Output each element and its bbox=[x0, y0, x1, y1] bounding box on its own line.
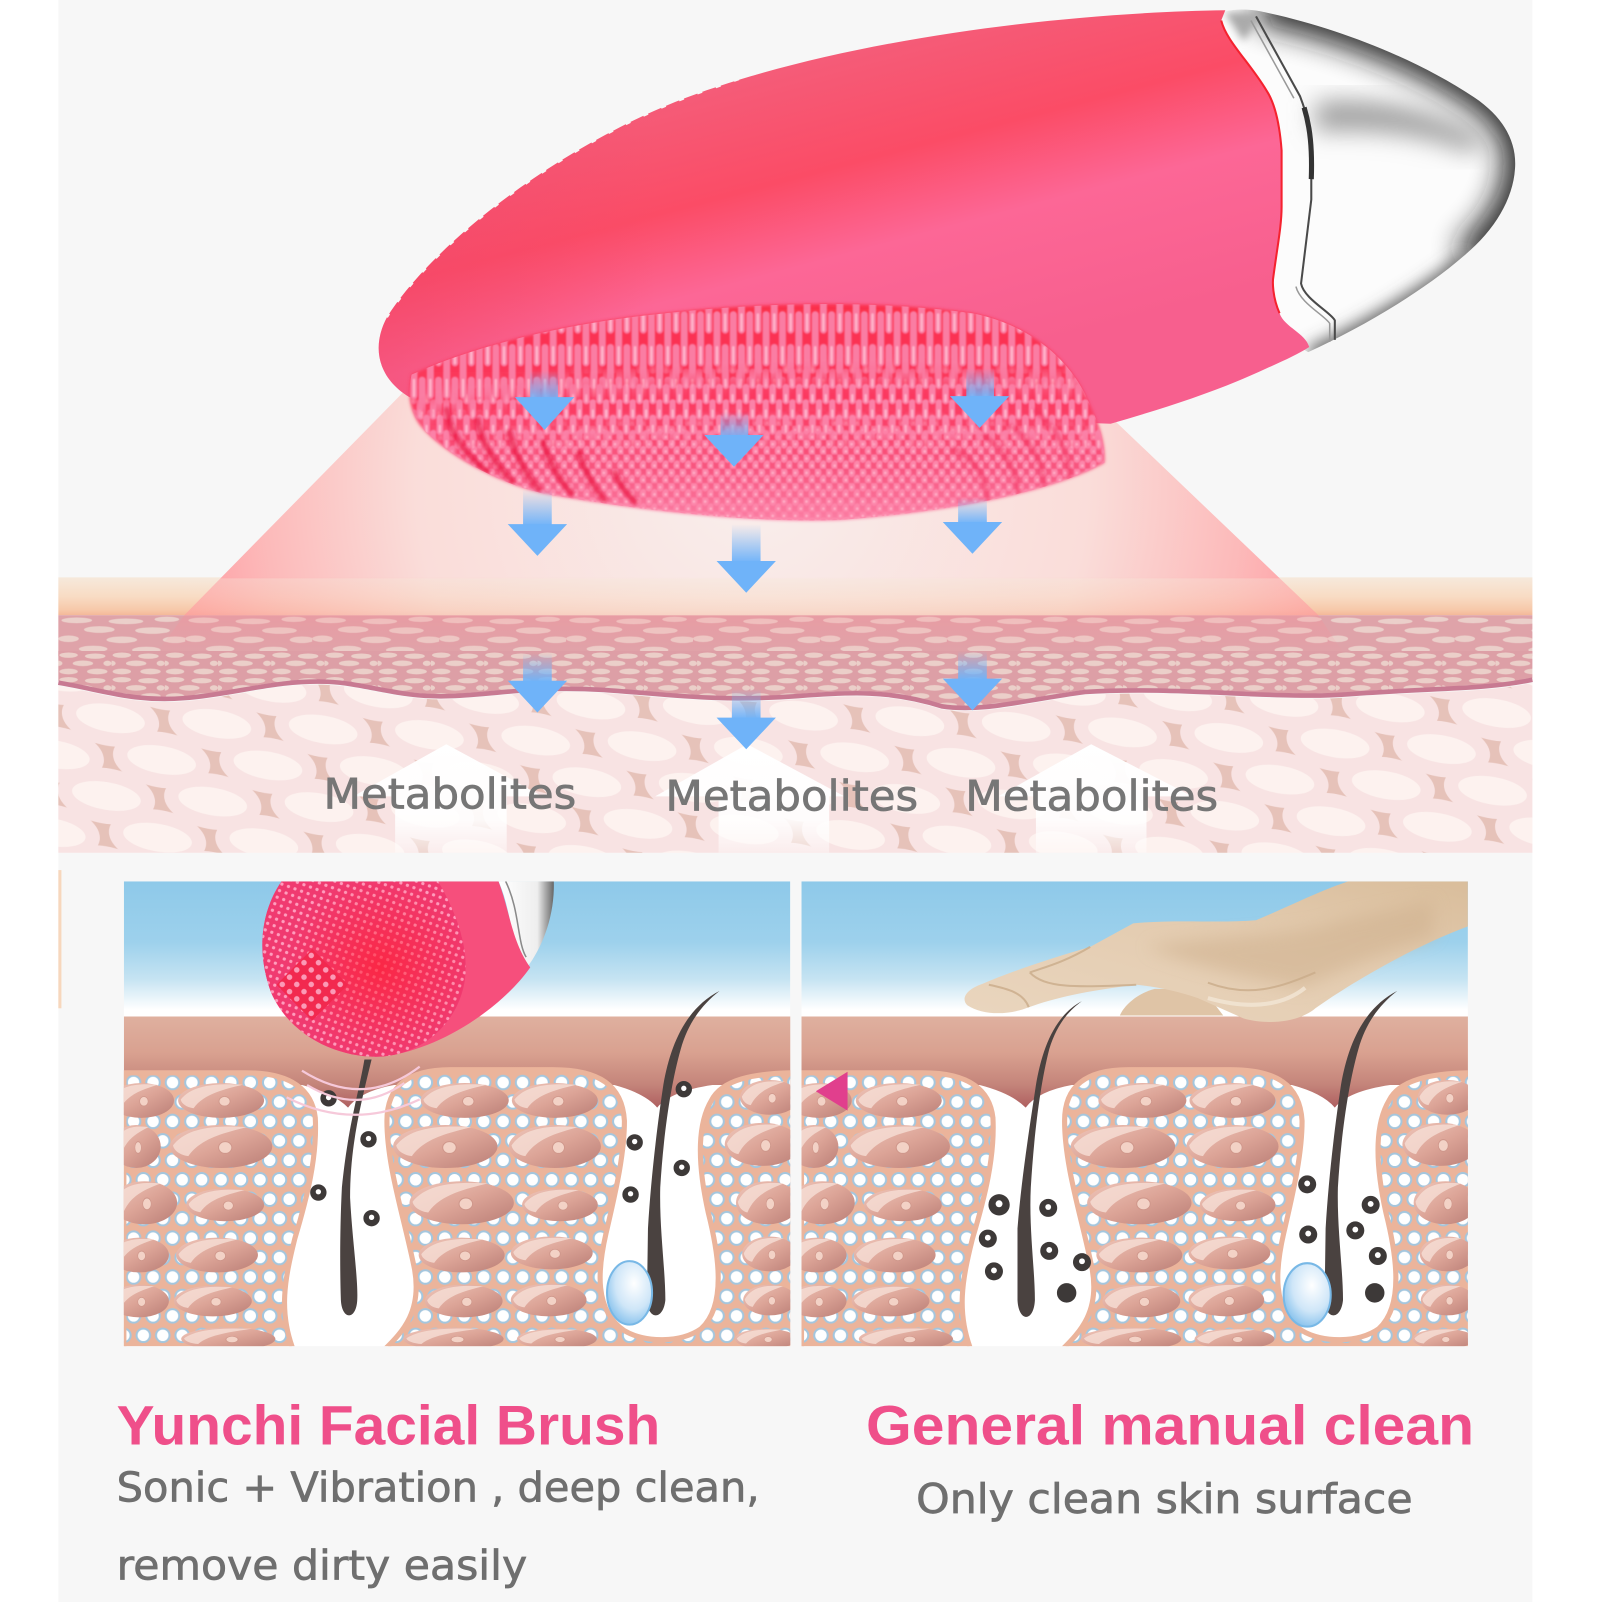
dermis boundary line bbox=[58, 680, 1532, 708]
skin and tissue bbox=[109, 1016, 800, 1351]
pink body bbox=[379, 10, 1309, 424]
heading: General manual clean: General manual clean bbox=[866, 1394, 1474, 1456]
arrow 3 bbox=[950, 369, 1009, 428]
arrow 4 bbox=[508, 489, 567, 556]
impurities bbox=[979, 1175, 1387, 1303]
text: manual description: Only clean skin surface bbox=[916, 1475, 1413, 1523]
text: brush description: remove dirty easily bbox=[117, 1541, 527, 1589]
metabolites labels: Metabolites bbox=[965, 772, 1218, 821]
panel: Yunchi facial brush comparison bbox=[109, 877, 800, 1351]
small brush device bbox=[256, 877, 554, 1060]
handle seam line bbox=[1256, 16, 1335, 340]
water droplet bbox=[1284, 1263, 1331, 1327]
sonic waves bbox=[287, 1067, 420, 1115]
silver handle bbox=[1224, 10, 1516, 352]
hair left bbox=[340, 1059, 372, 1315]
hair right bbox=[647, 991, 720, 1315]
metabolites labels: Metabolites bbox=[323, 770, 576, 819]
sky bbox=[802, 882, 1468, 1001]
impurities bbox=[310, 1081, 692, 1226]
hand bbox=[965, 881, 1468, 1022]
skin and tissue bbox=[786, 1016, 1478, 1351]
pink triangle marker bbox=[816, 1072, 848, 1111]
hair left bbox=[1018, 1001, 1082, 1317]
epidermis layer bbox=[58, 615, 1532, 706]
water droplet bbox=[607, 1261, 652, 1325]
bristle head bbox=[404, 292, 1116, 532]
text: brush description: Sonic + Vibration , deep clean, bbox=[117, 1464, 760, 1512]
arrow 6 bbox=[943, 497, 1002, 554]
light cone bbox=[154, 389, 1346, 657]
left edge artifact bbox=[58, 870, 61, 1008]
arrow 1 bbox=[515, 371, 574, 430]
arrow 5 bbox=[717, 524, 776, 593]
panel: general manual clean comparison bbox=[786, 881, 1478, 1351]
sky bbox=[124, 882, 790, 1001]
blue arrows bbox=[508, 369, 1009, 749]
dermis cells bbox=[58, 683, 1532, 853]
white metabolite arrows bbox=[353, 744, 1193, 853]
skin diagram: surface and layers bbox=[58, 577, 1532, 853]
arrow 9 bbox=[943, 651, 1002, 710]
arrow 2 bbox=[704, 412, 764, 467]
text: brush description bbox=[117, 1464, 760, 1589]
device: facial brush bbox=[379, 0, 1525, 532]
heading: Yunchi Facial Brush: Yunchi Facial Brush bbox=[117, 1394, 660, 1456]
hair right bbox=[1325, 991, 1397, 1315]
arrow 8 bbox=[717, 689, 776, 749]
metabolites labels bbox=[323, 770, 1218, 821]
arrow 7 bbox=[508, 653, 567, 712]
metabolites labels: Metabolites bbox=[665, 772, 918, 821]
skin surface band bbox=[58, 577, 1532, 615]
